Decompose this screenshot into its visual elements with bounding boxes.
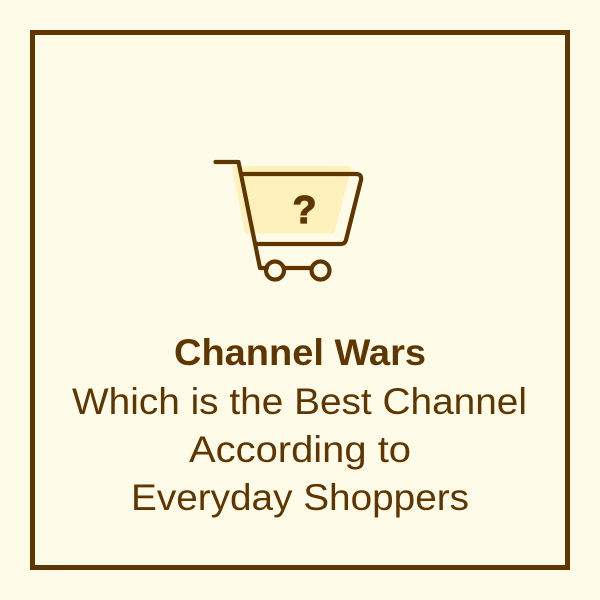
icon: shopping cart with question mark (216, 162, 361, 280)
title: Channel Wars: Channel Wars (174, 332, 426, 373)
frame border (32, 32, 568, 568)
subtitle line 2: According to (189, 429, 411, 470)
subtitle line 3: Everyday Shoppers (131, 477, 469, 518)
title block (72, 332, 527, 518)
cart basket (242, 174, 361, 244)
cart handle and frame (216, 162, 267, 268)
subtitle line 1: Which is the Best Channel (72, 381, 527, 422)
cart yellow fill (232, 166, 351, 234)
cart axle (284, 266, 312, 270)
right wheel (312, 262, 330, 280)
question mark: ? (292, 189, 316, 232)
left wheel (266, 262, 284, 280)
